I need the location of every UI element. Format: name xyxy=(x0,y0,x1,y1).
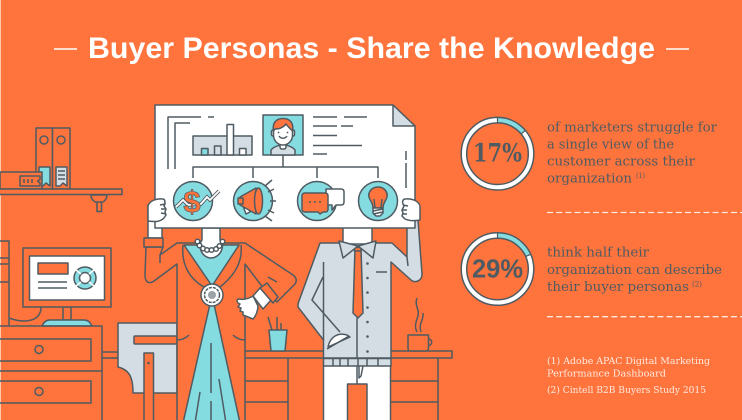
stat text: 17%: customer across their xyxy=(547,155,696,170)
man: shirt xyxy=(298,220,422,358)
woman: cuff xyxy=(144,238,163,247)
left cabinet xyxy=(0,241,9,326)
woman: jacket xyxy=(145,243,296,420)
stat text: 29%: their buyer personas xyxy=(547,280,689,295)
text lines left xyxy=(168,117,214,169)
paper fold xyxy=(393,105,415,126)
wall shelf with binders xyxy=(0,128,122,212)
man: hand in pocket xyxy=(328,334,350,347)
text lines right xyxy=(313,117,406,188)
woman: flower brooch xyxy=(201,284,223,306)
factory chart xyxy=(193,124,252,155)
woman: raised arm sleeve xyxy=(148,205,162,238)
stat text: 29%: (2) xyxy=(692,280,702,288)
stat ring: 17% xyxy=(461,117,534,190)
chair xyxy=(118,323,177,420)
man: trouser inseam xyxy=(348,384,367,420)
man figure xyxy=(298,220,422,420)
icon: dollar growth xyxy=(174,182,219,220)
woman: wrist cuff xyxy=(260,283,278,303)
man: neck xyxy=(343,226,372,244)
coffee cup xyxy=(408,298,432,351)
computer monitor xyxy=(9,248,111,326)
stat text: 17% xyxy=(547,121,718,186)
man: tie xyxy=(353,248,363,318)
connector lines xyxy=(193,155,378,178)
woman: hand on hip xyxy=(237,296,258,319)
stat text: 29%: organization can describe xyxy=(547,263,722,278)
man: hand holding paper xyxy=(402,199,420,221)
woman: lapels and pockets xyxy=(160,245,277,420)
stat ring: 17%: 17% xyxy=(473,138,522,168)
woman: lower dress xyxy=(183,295,240,420)
icon: dollar growth: $ xyxy=(183,184,201,219)
title: Buyer Personas - Share the Knowledge xyxy=(88,32,655,65)
man: collar xyxy=(339,241,358,258)
stat text: 17%: of marketers struggle for xyxy=(547,121,718,136)
stat text: 29%: think half their xyxy=(547,246,650,261)
footnotes: (1) Adobe APAC Digital Marketing xyxy=(547,356,710,367)
man: waistband xyxy=(324,358,391,366)
icon: chat bubbles xyxy=(298,182,344,220)
stat ring: 29%: 29% xyxy=(472,254,523,284)
icon: light bulb xyxy=(358,182,398,220)
persona portrait xyxy=(263,115,303,155)
held up document xyxy=(155,105,415,228)
man: arm detail xyxy=(312,257,408,340)
stat text: 29% xyxy=(547,246,722,295)
woman: white sleeve xyxy=(253,288,271,309)
woman: dress bodice xyxy=(184,245,239,286)
right desk xyxy=(118,351,452,420)
dashed divider xyxy=(547,316,742,318)
stat text: 17%: a single view of the xyxy=(547,138,674,152)
woman: neck xyxy=(200,228,222,258)
stat text: 17%: (1) xyxy=(636,172,645,180)
woman: pearl necklace xyxy=(195,239,225,252)
footnotes xyxy=(547,356,710,396)
dashed divider xyxy=(547,212,742,214)
footnotes: (2) Cintell B2B Buyers Study 2015 xyxy=(547,385,706,396)
pencil cup xyxy=(268,317,287,351)
woman figure xyxy=(144,205,296,420)
footnotes: Performance Dashboard xyxy=(547,369,666,380)
icon: megaphone xyxy=(234,180,276,221)
paper sheet xyxy=(155,105,415,228)
left desk with drawers xyxy=(0,326,118,420)
man: trousers xyxy=(324,364,390,420)
stat text: 17%: organization xyxy=(547,172,632,186)
man: shirt pocket xyxy=(376,271,387,273)
man: shirt buttons xyxy=(366,262,369,353)
woman: hand holding paper xyxy=(148,199,166,222)
stat ring: 29% xyxy=(461,233,534,305)
